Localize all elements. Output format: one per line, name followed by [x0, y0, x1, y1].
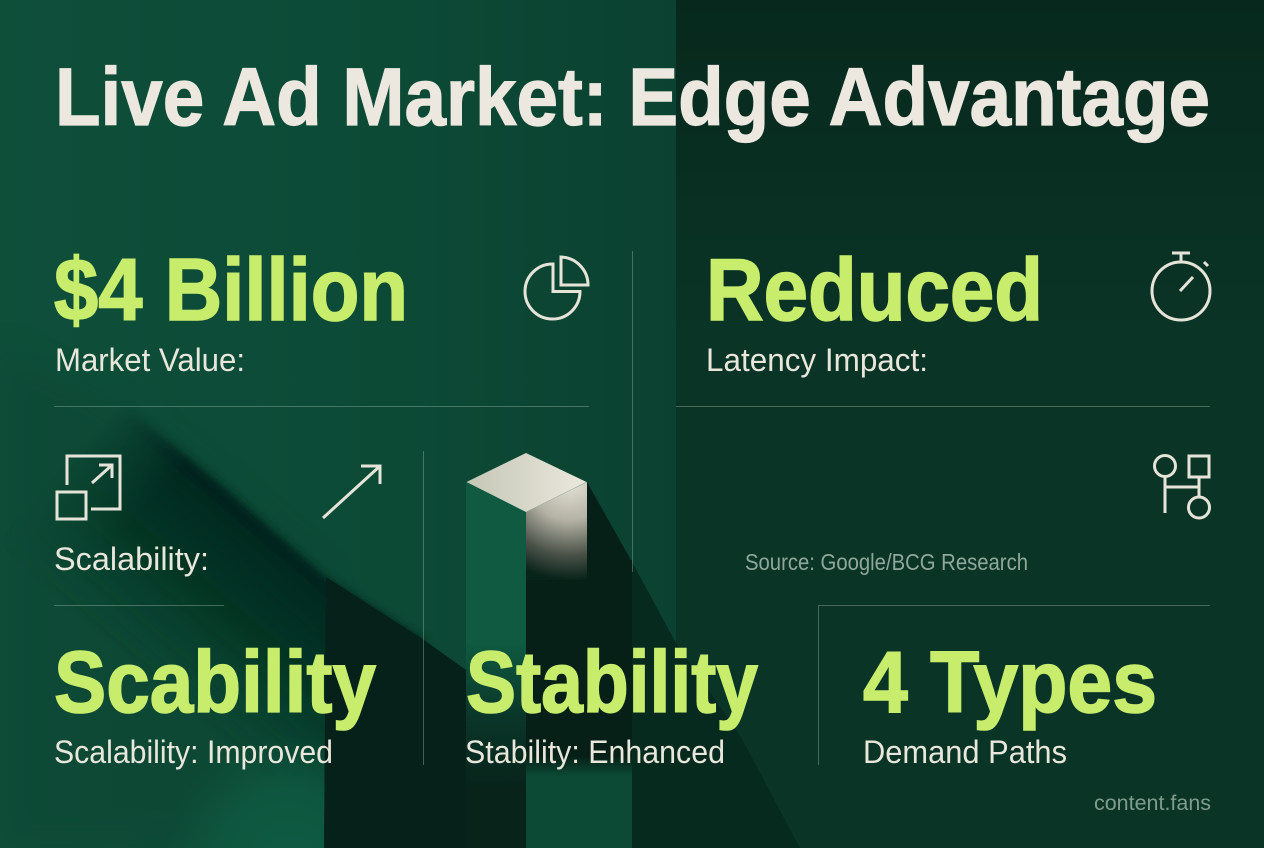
panel: demand paths — [863, 634, 1157, 770]
icon: stopwatch — [1152, 253, 1210, 320]
metric: 4 Types: 4 Types — [863, 634, 1157, 731]
panel: latency impact — [706, 240, 1210, 378]
label: scalability improved: Scalability: Improved — [54, 734, 333, 770]
metric: $4 Billion: $4 Billion — [54, 240, 408, 339]
icon: pie chart — [525, 257, 588, 319]
icon: resize squares — [57, 456, 120, 519]
panel: scability — [54, 634, 376, 770]
3D pillar — [466, 453, 587, 848]
label: stability enhanced: Stability: Enhanced — [465, 734, 725, 770]
icon: flow diagram — [1154, 456, 1210, 518]
metric: Stability: Stability — [466, 634, 758, 731]
panel: scalability icons — [54, 456, 380, 577]
source note: Source: Google/BCG Research — [745, 549, 1028, 575]
panel: stability — [465, 634, 758, 770]
icon: growth arrow — [323, 466, 380, 518]
brand credit: content.fans — [1094, 791, 1211, 815]
metric: Reduced: Reduced — [706, 240, 1043, 339]
label: scalability: Scalability: — [54, 541, 209, 577]
label: market value: Market Value: — [55, 342, 245, 378]
label: demand paths: Demand Paths — [863, 734, 1067, 770]
label: latency impact: Latency Impact: — [706, 342, 928, 378]
metric: Scability: Scability — [54, 634, 376, 731]
panel: market value — [54, 240, 588, 378]
diagonal shadow — [46, 414, 427, 848]
dark columns — [324, 482, 800, 848]
